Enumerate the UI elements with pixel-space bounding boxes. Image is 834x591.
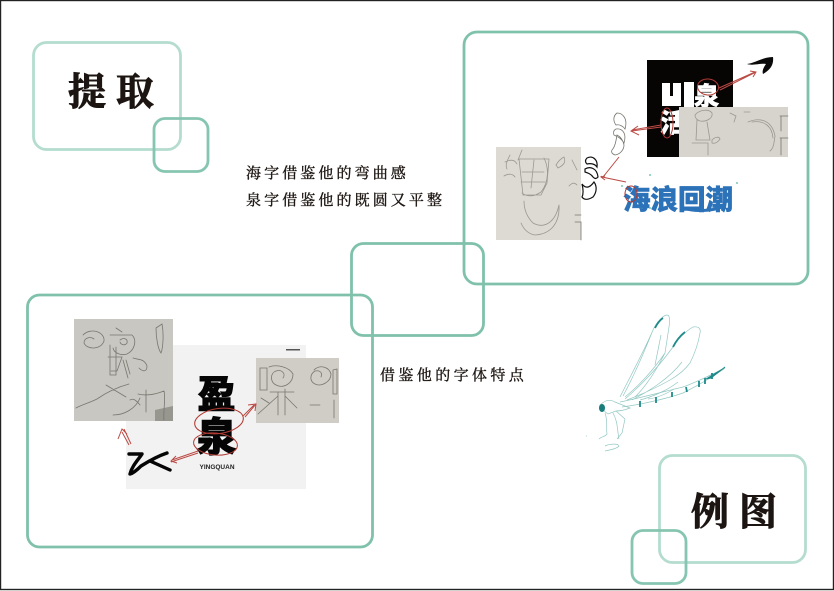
heading: 例图: [632, 456, 806, 584]
abdomen: [620, 367, 725, 407]
black logo tile: 泉: [694, 82, 719, 111]
extracted strokes: black outlines: [582, 157, 598, 199]
logo: 盈泉: YINGQUAN: [199, 464, 235, 471]
text block: stroke references: 泉字借鉴他的既圆又平整: [246, 191, 445, 209]
red highlight: upper circle: [193, 405, 245, 437]
text block: font features: 借鉴他的字体特点: [380, 366, 527, 384]
logo: 盈泉: [196, 349, 300, 471]
extracted black stroke: [129, 453, 170, 474]
sketch photo: right: [256, 358, 339, 423]
sketch photo: 海: [496, 147, 581, 240]
arrow: extracted stroke to large sketch: [118, 429, 131, 445]
arrow: circle to extracted stroke: [171, 451, 198, 463]
black logo tile: [647, 60, 733, 157]
arrow: grey outline to sketch: [601, 157, 619, 177]
head and thorax: [599, 400, 630, 414]
red highlight: 泉 hook: [697, 78, 719, 96]
red highlight: lower circle: [193, 431, 238, 457]
extracted strokes: grey outlines: [612, 113, 626, 155]
legs: [586, 411, 625, 451]
arrow: circle to right sketch: [243, 404, 256, 417]
heading: 提取: 提取: [68, 72, 164, 114]
wings: [620, 315, 700, 400]
red highlight: 活 stroke: [661, 108, 673, 138]
sketch photo: 泉: [679, 107, 788, 157]
illustration: dragonfly: [586, 315, 725, 451]
heading: 例图: 例图: [691, 492, 787, 534]
connector square between frames: [352, 244, 484, 336]
sketch photo: large: [74, 319, 173, 421]
example: 海浪回潮 logo study: [496, 57, 788, 240]
logo: 海浪回潮: 海浪回潮: [623, 184, 733, 215]
arrow: stroke to grey outline: [631, 125, 661, 135]
panel: bottom-left example frame: [28, 295, 372, 547]
example: 盈泉 logo study: [74, 319, 339, 489]
arrow: hook to extracted stroke: [719, 71, 756, 90]
text block: stroke references: [246, 164, 445, 209]
arrow: logo to black outline: [601, 176, 626, 182]
black logo tile: 活: [660, 108, 686, 138]
text block: stroke references: 海字借鉴他的弯曲感: [246, 164, 409, 182]
heading: 提取: [34, 42, 208, 172]
logo: 盈泉: 盈: [197, 375, 236, 417]
panel: top-right example frame: [464, 32, 808, 284]
light grey logo card: [126, 345, 306, 489]
extracted black hook: [747, 57, 773, 74]
logo: 盈泉: 泉: [196, 416, 236, 460]
